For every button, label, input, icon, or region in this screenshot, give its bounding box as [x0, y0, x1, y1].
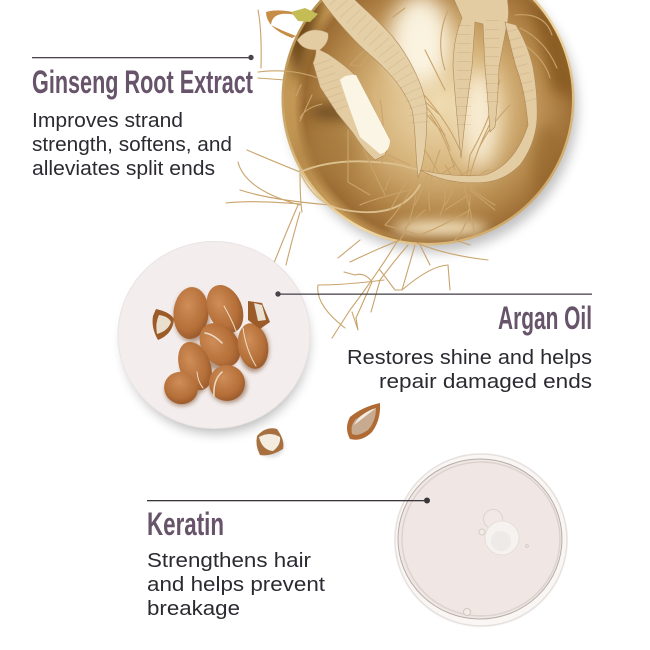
description: ginseng: alleviates split ends: [32, 158, 215, 180]
argan oil callout: [275, 291, 592, 393]
description: argan: repair damaged ends: [379, 371, 592, 393]
thin roots: [226, 8, 557, 338]
description: argan: Restores shine and helps: [347, 347, 592, 369]
heading: Keratin: Keratin: [147, 506, 224, 542]
root: large centre taproot: [320, 0, 427, 177]
root: cut ginseng: [266, 8, 390, 160]
heading: Ginseng Root Extract: Ginseng Root Extract: [32, 64, 253, 100]
argan nut cluster: [160, 279, 272, 409]
root: right legs: [420, 0, 537, 183]
description: keratin: and helps prevent: [147, 574, 325, 596]
argan shell fragment: [347, 403, 380, 440]
bubbles: [464, 510, 528, 616]
description: ginseng: [32, 110, 232, 180]
description: ginseng: strength, softens, and: [32, 134, 232, 156]
shard right: [248, 301, 270, 329]
description: keratin: breakage: [147, 598, 240, 620]
leader line: ginseng: [32, 55, 254, 60]
leader line: argan: [275, 291, 592, 297]
ginseng callout: [32, 55, 254, 180]
description: keratin: [147, 550, 325, 620]
photo: petri dish with keratin gel: [395, 454, 567, 626]
description: argan: [347, 347, 592, 393]
heading: Argan Oil: Argan Oil: [498, 300, 592, 336]
shard left: [153, 309, 174, 340]
photo: golden bowl with ginseng roots: [226, 0, 578, 338]
description: keratin: Strengthens hair: [147, 550, 311, 572]
argan kernel below plate: [256, 428, 284, 457]
photo: white plate with argan nuts: [118, 242, 310, 433]
keratin callout: [147, 498, 430, 620]
description: ginseng: Improves strand: [32, 110, 183, 132]
leader line: keratin: [147, 498, 430, 504]
